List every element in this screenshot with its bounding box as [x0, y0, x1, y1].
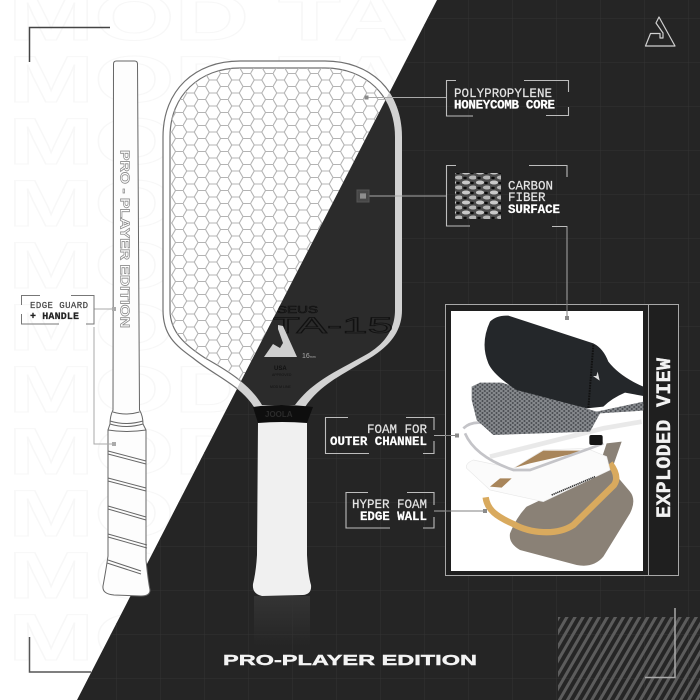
- paddle honeycomb core: [170, 68, 386, 382]
- callout: foam for outer channel: OUTER CHANNEL: [330, 435, 427, 449]
- title: pro-player edition: PRO-PLAYER EDITION: [223, 653, 477, 669]
- callout lines over exploded image: [445, 300, 569, 513]
- exploded image background: [451, 311, 643, 571]
- handle collar: [253, 405, 313, 423]
- watermark text: [8, 0, 408, 674]
- callout: edge guard + handle: EDGE GUARD: [30, 301, 88, 311]
- watermark text: MOD TA: [8, 228, 408, 302]
- exploded view panel: [446, 304, 678, 576]
- callout: polypropylene honeycomb core: POLYPROPYLENE: [454, 87, 552, 101]
- watermark text: MOD TA: [8, 42, 408, 116]
- callout: polypropylene honeycomb core: [446, 80, 568, 116]
- icon: carbon marker: [357, 190, 369, 202]
- watermark text: MOD TA: [8, 352, 408, 426]
- edge guard and handle drawing: [103, 61, 150, 596]
- collar text: JOOLA: [265, 410, 293, 419]
- watermark text: MOD TA: [8, 476, 408, 550]
- carbon fiber swatch: [455, 173, 501, 219]
- vertical handle text: PRO - PLAYER EDITION: [118, 150, 132, 328]
- paddle model text: TA-15: [272, 313, 393, 338]
- callout: carbon fiber surface: [446, 166, 567, 226]
- watermark text: MOD TA: [8, 104, 408, 178]
- callout: hyper foam edge wall: HYPER FOAM: [352, 498, 427, 512]
- part: foam tip: [589, 435, 603, 445]
- callout lines and dots: [94, 96, 569, 511]
- watermark text: MOD TA: [8, 600, 408, 674]
- exploded view title: EXPLODED VIEW: [654, 358, 677, 518]
- corner bracket: top left: [30, 28, 110, 62]
- callout: foam for outer channel: FOAM FOR: [367, 423, 427, 437]
- callout: carbon fiber surface: SURFACE: [508, 203, 560, 217]
- watermark text: MOD TA: [8, 290, 408, 364]
- part: white edge guard: [466, 448, 610, 502]
- paddle model text: USA: [274, 366, 287, 372]
- paddle model text: SEUS: [277, 305, 318, 316]
- corner bracket: bottom left: [30, 637, 91, 672]
- part: backing sheet: [510, 442, 633, 566]
- part: honeycomb core: [472, 383, 643, 435]
- paddle model text: APPROVED: [272, 373, 292, 377]
- watermark text: MOD TA: [8, 538, 408, 612]
- white grip: [253, 422, 311, 596]
- pickleball paddle: [163, 61, 402, 646]
- callout: edge guard + handle: [22, 296, 94, 324]
- callout: hyper foam edge wall: [346, 492, 434, 528]
- corner bracket: bottom right: [645, 608, 675, 678]
- paddle model text: [270, 305, 393, 389]
- part: face logo: [593, 372, 600, 381]
- callout: polypropylene honeycomb core: HONEYCOMB CORE: [454, 98, 555, 112]
- callout: hyper foam edge wall: EDGE WALL: [360, 510, 427, 524]
- part: carbon face: [485, 316, 643, 408]
- hatched corner block: [558, 617, 700, 700]
- exploded parts: [463, 316, 643, 566]
- part: gold edge wall: [486, 463, 616, 532]
- paddle model text: 16mm: [302, 353, 316, 360]
- callout: edge guard + handle: + HANDLE: [30, 312, 79, 323]
- paddle model text: MOD M LINE: [270, 385, 291, 389]
- callout: carbon fiber surface: CARBON: [508, 180, 553, 194]
- paddle logo: [264, 325, 297, 357]
- callout: carbon fiber surface: FIBER: [508, 191, 546, 205]
- watermark text: MOD TA: [8, 414, 408, 488]
- callout: foam for outer channel: [326, 418, 434, 454]
- part: outer channel foam: [463, 423, 603, 470]
- grip reflection: [254, 596, 310, 646]
- brand logo: top right: [646, 17, 675, 46]
- paddle rim: light side: [163, 61, 402, 407]
- paddle rim: dark side: [237, 92, 402, 407]
- watermark text: MOD TA: [8, 166, 408, 240]
